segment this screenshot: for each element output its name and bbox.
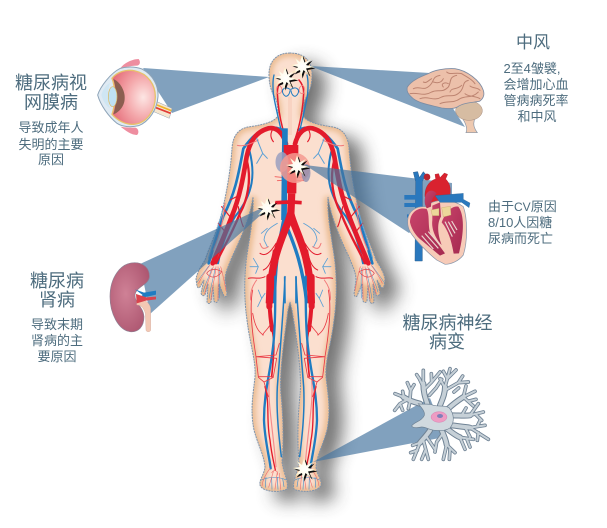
beam: heart [305, 165, 452, 233]
text: retinopathy: 原因 [38, 152, 64, 167]
text: retinopathy: 失明的主要 [18, 137, 84, 152]
text: neuropathy: 糖尿病神经 [402, 313, 492, 333]
text: retinopathy [15, 73, 87, 167]
text: nephropathy [30, 271, 84, 364]
text: nephropathy: 糖尿病 [30, 271, 84, 291]
text: cardiovascular: 8/10人因糖 [488, 215, 552, 230]
body drop shadow [210, 63, 399, 501]
text: neuropathy [402, 313, 492, 352]
text: nephropathy: 肾病 [39, 290, 75, 310]
beam: nerve [313, 398, 445, 462]
text: stroke: 和中风 [517, 109, 557, 124]
stars: complication sites [256, 55, 318, 482]
icon: brain [407, 69, 484, 133]
text: stroke: 中风 [516, 33, 550, 52]
text: nephropathy: 导致末期 [31, 317, 83, 332]
text: cardiovascular [488, 199, 557, 246]
beam: brain [310, 66, 465, 127]
text: retinopathy: 网膜病 [24, 92, 78, 112]
text: stroke: 会增加心血 [503, 77, 569, 92]
icon: heart [404, 172, 470, 264]
text: stroke: 2至4皱襞, [503, 61, 561, 76]
beam: eye [143, 68, 269, 113]
text: retinopathy: 导致成年人 [18, 120, 84, 135]
icon: nerve cell [395, 369, 488, 459]
text: stroke [503, 33, 569, 124]
text: stroke: 管病病死率 [503, 93, 569, 108]
text: nephropathy: 肾病的主 [31, 333, 83, 348]
human body figure [196, 53, 385, 491]
beam: kidney [140, 208, 263, 314]
text: cardiovascular: 由于CV原因 [488, 199, 557, 214]
text: nephropathy: 要原因 [37, 349, 77, 364]
vessels upper body [197, 75, 384, 303]
text: retinopathy: 糖尿病视 [15, 73, 87, 93]
vessels legs and feet [251, 277, 330, 489]
icon: kidney [110, 263, 156, 332]
heart silhouette in chest [276, 152, 310, 183]
icon: eye [98, 59, 172, 135]
text: neuropathy: 病变 [429, 332, 465, 352]
text: cardiovascular: 尿病而死亡 [488, 231, 553, 246]
